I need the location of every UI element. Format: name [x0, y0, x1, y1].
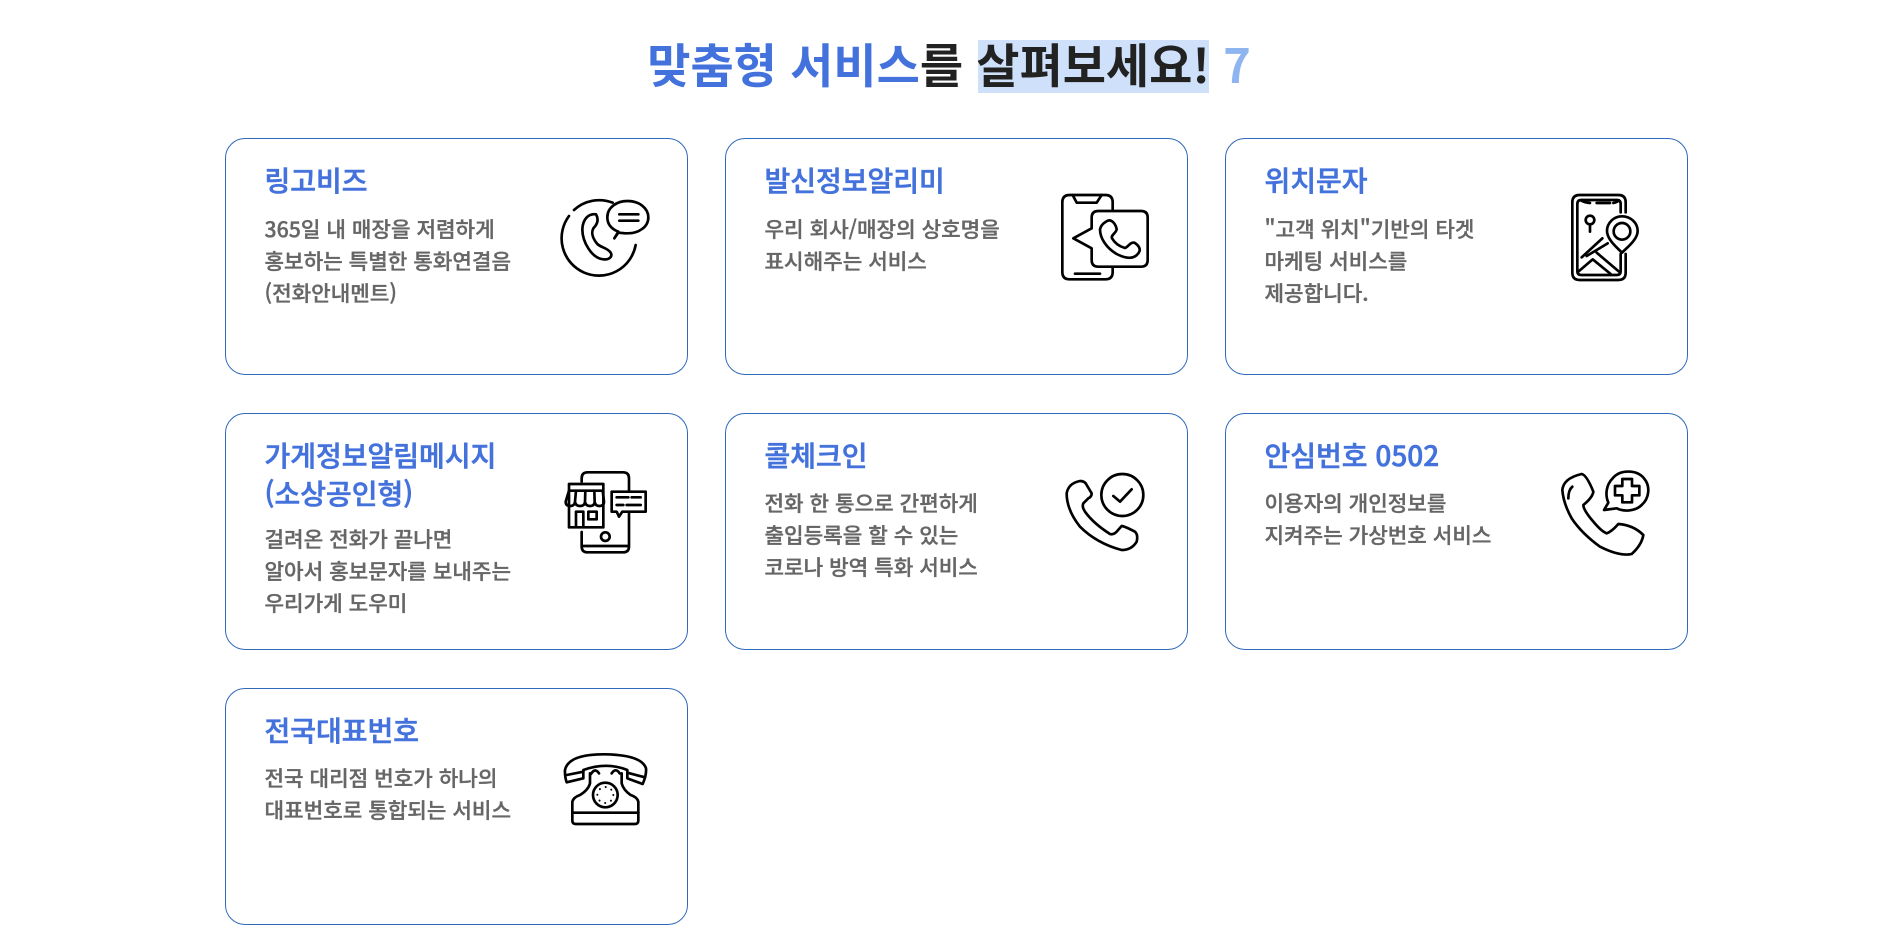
text block: 전화 한 통으로 간편하게 [764, 487, 978, 518]
text block [264, 762, 511, 825]
text block: 제공합니다. [1264, 277, 1369, 308]
heading: 전국대표번호 [264, 710, 419, 750]
panel: 안심번호 0502 [1225, 413, 1688, 650]
text block [764, 213, 1000, 276]
icon: phone circle with speech bubble [560, 198, 650, 277]
text block: 출입등록을 할 수 있는 [764, 519, 958, 550]
heading: 콜체크인 [764, 435, 868, 475]
icon: rotary telephone [564, 753, 648, 826]
text block: "고객 위치"기반의 타겟 [1264, 213, 1474, 244]
heading: (소상공인형) [264, 473, 413, 513]
panel: 전국대표번호 [225, 688, 688, 925]
text block: 지켜주는 가상번호 서비스 [1264, 519, 1491, 550]
icon: handset with medical cross bubble [1561, 470, 1650, 556]
title: 맞춤형 서비스를 살펴보세요! 7 [647, 28, 1251, 97]
panel: 발신정보알리미 [725, 138, 1188, 375]
text block: 홍보하는 특별한 통화연결음 [264, 245, 511, 276]
icon: smartphone with call bubble [1061, 194, 1149, 281]
icon: smartphone with shop and message [564, 471, 647, 554]
heading: 링고비즈 [264, 160, 368, 200]
text block [1264, 487, 1491, 550]
heading: 위치문자 [1264, 160, 1368, 200]
text block: (전화안내멘트) [264, 277, 397, 308]
text block: 365일 내 매장을 저렴하게 [264, 213, 495, 244]
panel: 가게정보알림메시지 [225, 413, 688, 650]
text block [264, 523, 511, 618]
icon: smartphone map with pin [1571, 194, 1639, 282]
icon: handset with check mark [1065, 472, 1145, 552]
text block: 알아서 홍보문자를 보내주는 [264, 555, 511, 586]
panel: 링고비즈 [225, 138, 688, 375]
panel: 콜체크인 [725, 413, 1188, 650]
panel: 위치문자 [1225, 138, 1688, 375]
text block: 우리가게 도우미 [264, 587, 407, 618]
heading: 발신정보알리미 [764, 160, 945, 200]
text block: 이용자의 개인정보를 [1264, 487, 1446, 518]
text block [264, 213, 511, 308]
heading: 가게정보알림메시지 [264, 435, 496, 475]
text block: 우리 회사/매장의 상호명을 [764, 213, 1000, 244]
title highlight [978, 40, 1209, 93]
text block [764, 487, 978, 582]
text block [1264, 213, 1474, 308]
text block: 전국 대리점 번호가 하나의 [264, 762, 497, 793]
text block: 표시해주는 서비스 [764, 245, 927, 276]
text block: 코로나 방역 특화 서비스 [764, 551, 978, 582]
text block: 마케팅 서비스를 [1264, 245, 1407, 276]
heading [264, 435, 496, 513]
text block: 걸려온 전화가 끝나면 [264, 523, 452, 554]
text block: 대표번호로 통합되는 서비스 [264, 794, 511, 825]
heading: 안심번호 0502 [1264, 435, 1439, 475]
